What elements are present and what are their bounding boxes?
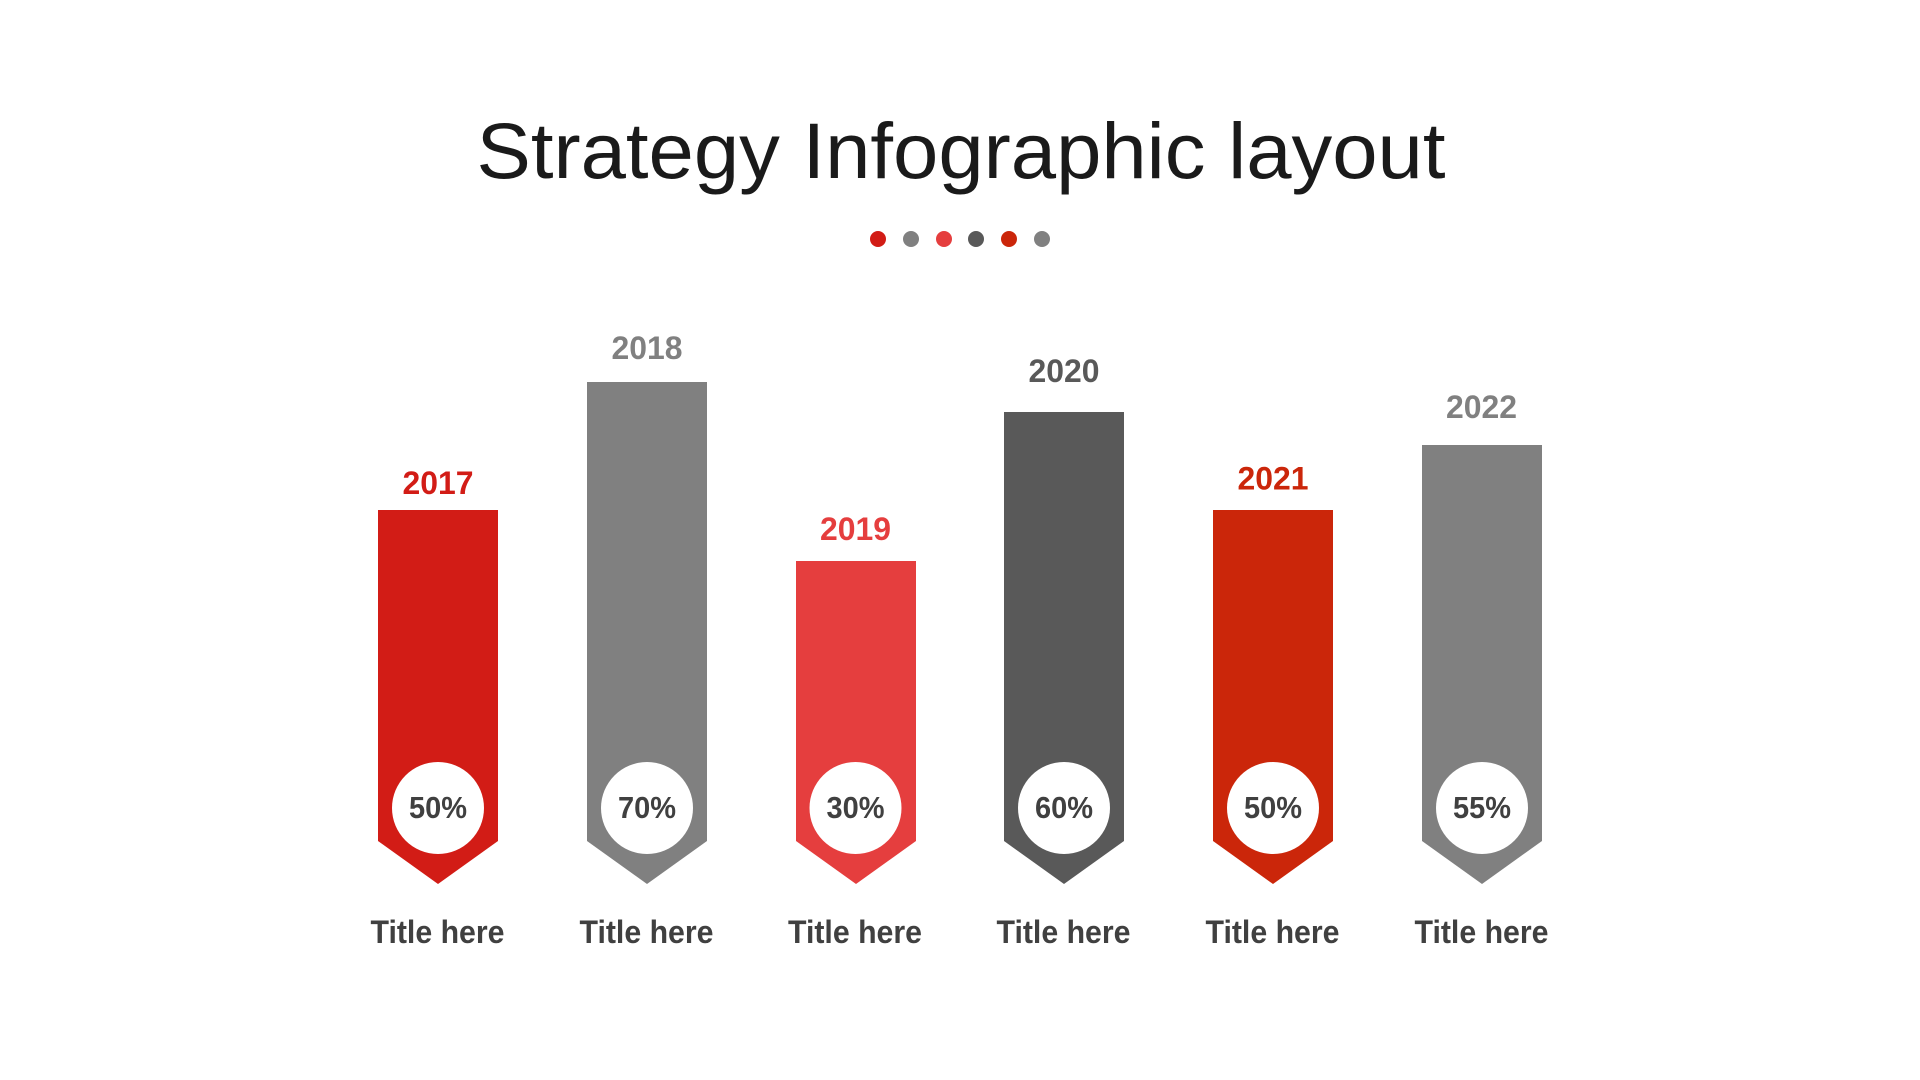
circle badge 2019	[810, 762, 902, 854]
percent 2019: 30%	[826, 790, 884, 825]
year label 2021: 2021	[1238, 460, 1308, 496]
percent 2018: 70%	[618, 790, 676, 825]
circle badge 2018	[601, 762, 693, 854]
column: 2022	[1414, 389, 1548, 950]
percent 2022: 55%	[1453, 790, 1511, 825]
circle badge 2017	[392, 762, 484, 854]
percent 2021: 50%	[1244, 790, 1302, 825]
circle badge 2020	[1018, 762, 1110, 854]
decorative dot row	[870, 231, 1050, 247]
arrow bar 2020	[1004, 412, 1124, 884]
percent 2017: 50%	[409, 790, 467, 825]
caption 2021: Title here	[1206, 914, 1340, 950]
caption 2017: Title here	[370, 914, 504, 950]
year label 2017: 2017	[402, 465, 474, 501]
caption 2020: Title here	[996, 914, 1130, 950]
caption 2022: Title here	[1414, 914, 1548, 950]
arrow bar 2021	[1213, 510, 1333, 884]
column: 2017	[370, 465, 504, 950]
circle badge 2021	[1227, 762, 1319, 854]
column: 2018	[580, 330, 714, 950]
caption 2018: Title here	[580, 914, 714, 950]
arrow bar 2017	[378, 510, 498, 884]
percent 2020: 60%	[1035, 790, 1093, 825]
title: Strategy Infographic layout	[476, 106, 1446, 195]
column: 2021	[1206, 460, 1340, 950]
year label 2022: 2022	[1446, 389, 1517, 425]
year label 2018: 2018	[612, 330, 682, 366]
circle badge 2022	[1436, 762, 1528, 854]
year label 2020: 2020	[1028, 353, 1100, 389]
column: 2020	[996, 353, 1130, 950]
arrow bar 2022	[1422, 445, 1542, 884]
arrow bar 2019	[796, 561, 916, 884]
year label 2019: 2019	[820, 511, 891, 547]
caption 2019: Title here	[788, 914, 922, 950]
column: 2019	[788, 511, 922, 950]
arrow bar 2018	[587, 382, 707, 884]
